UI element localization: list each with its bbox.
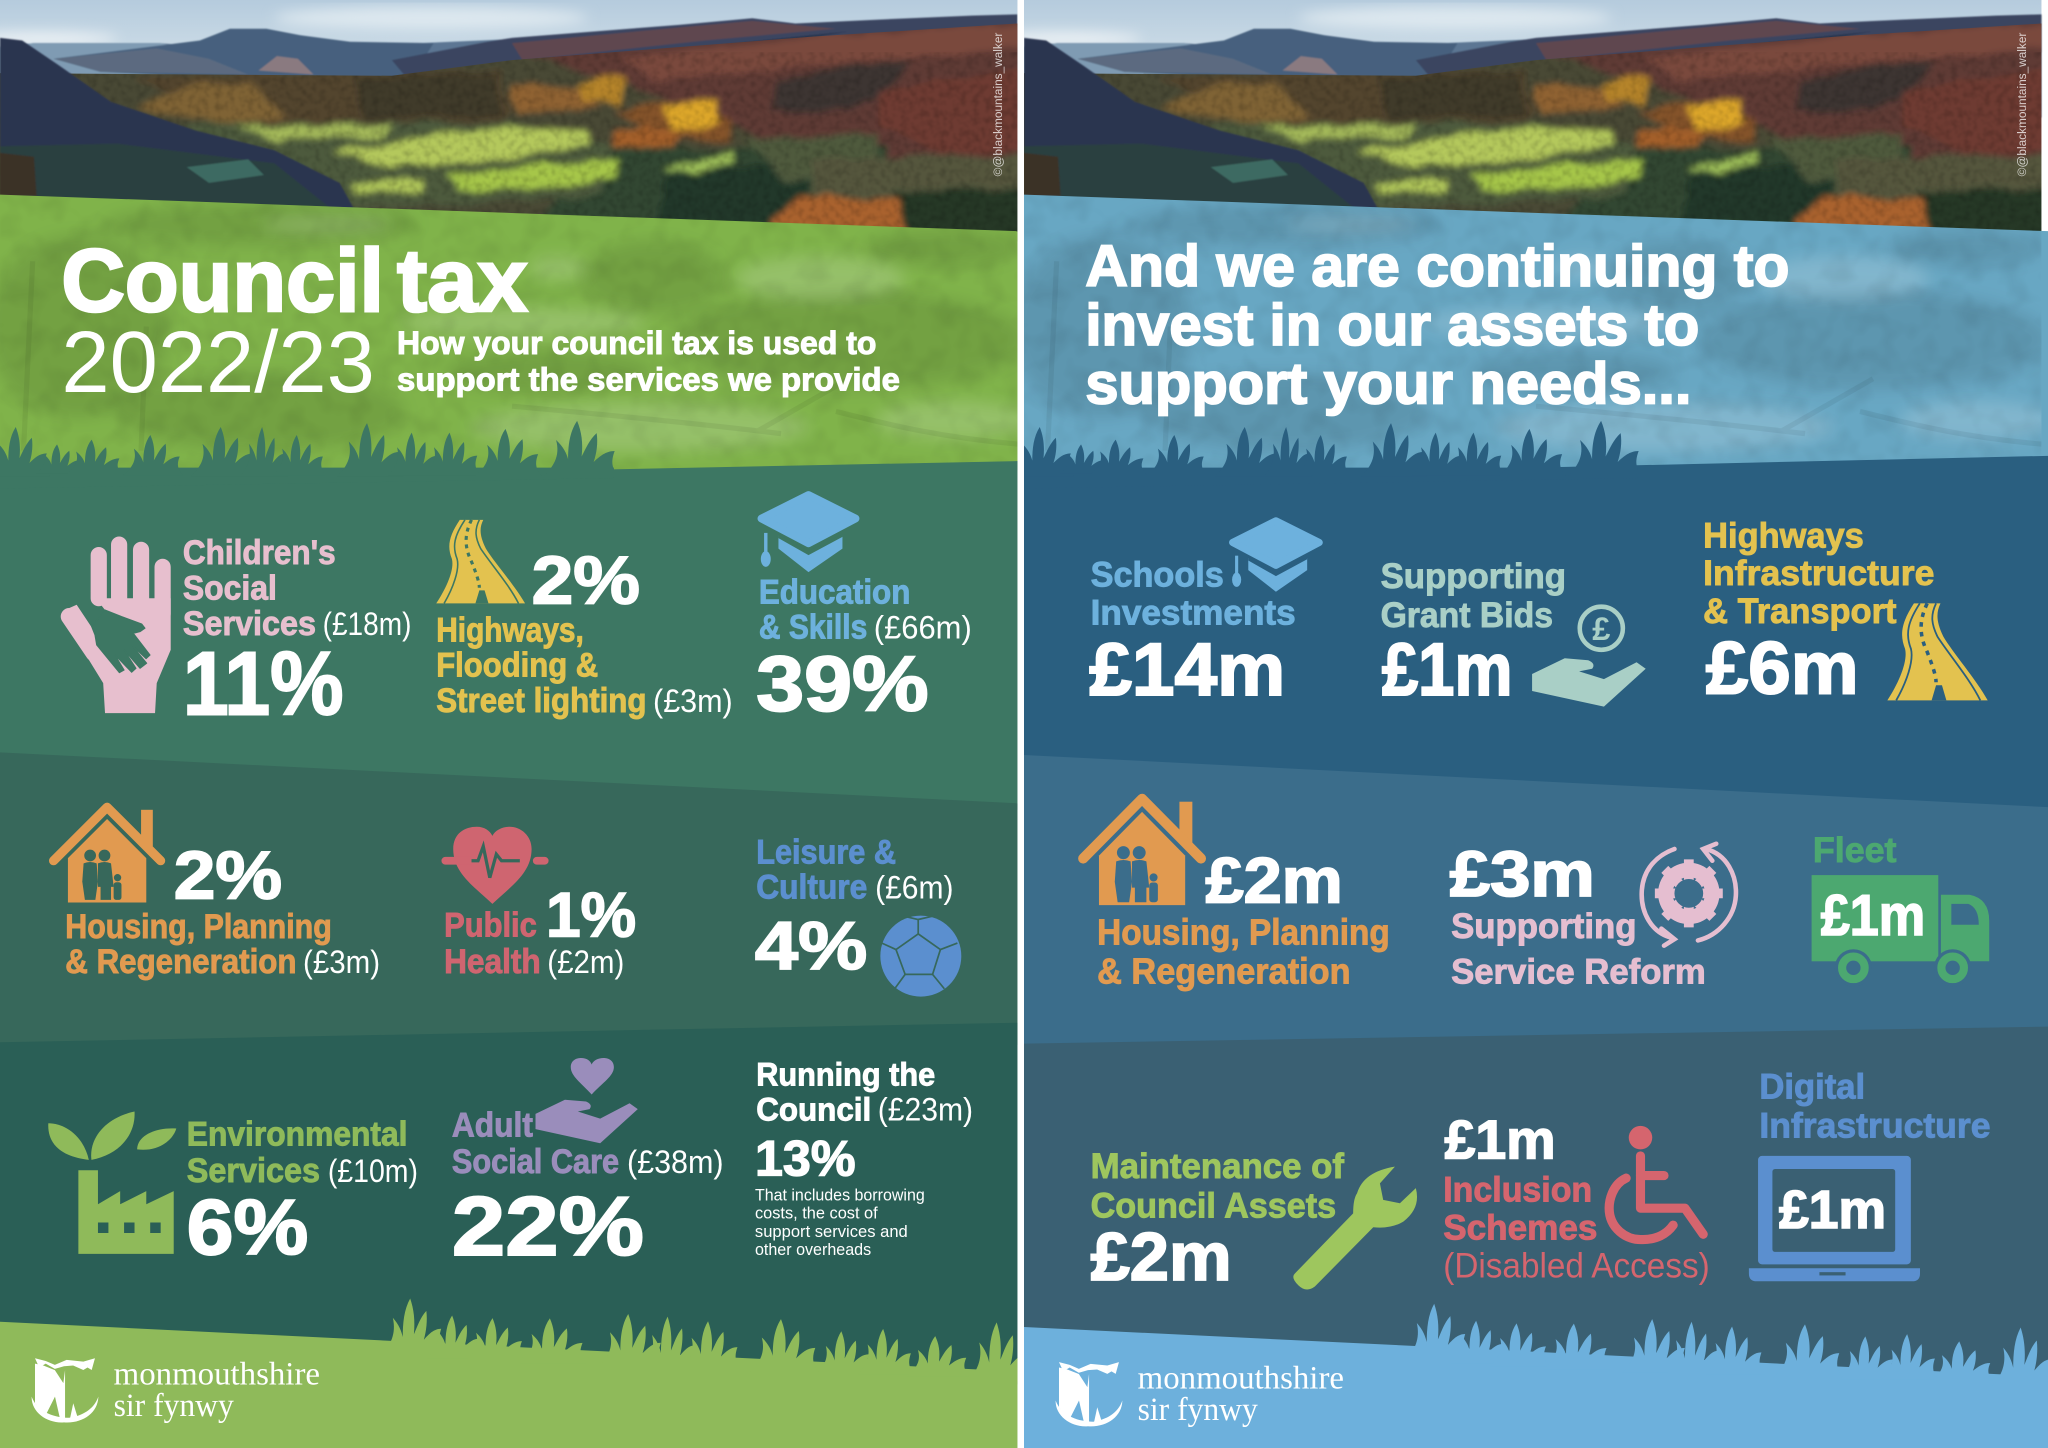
- title: And we are continuing to: [1085, 234, 1789, 299]
- item: highways: Street lighting: [436, 682, 647, 720]
- band: row three: [1024, 1027, 2048, 1384]
- icon: graduation cap: [761, 495, 856, 572]
- item: running the council: Council: [756, 1091, 871, 1128]
- photo credit: ©@blackmountains_walker: [2015, 33, 2029, 176]
- item: highways infrastructure: Highways: [1703, 516, 1864, 555]
- year: 2022/23: [61, 313, 375, 411]
- grass silhouette top: [0, 421, 615, 482]
- title: Council: [61, 231, 384, 330]
- item: highways: Highways,: [436, 611, 584, 649]
- title: [64, 245, 530, 314]
- item: running the council: Running the: [756, 1055, 935, 1092]
- icon: hand with coin: [1532, 607, 1646, 707]
- item: schools investments: Investments: [1091, 593, 1296, 632]
- item: inclusion schemes: [1443, 1109, 1710, 1285]
- panel: investment: [985, 0, 2048, 1448]
- item: highways infrastructure: £6m: [1706, 627, 1859, 710]
- item: inclusion schemes: Inclusion: [1443, 1171, 1592, 1210]
- item: housing: (£3m): [303, 943, 380, 980]
- item: inclusion schemes: (Disabled Access): [1443, 1246, 1710, 1285]
- item: highways: [436, 520, 733, 720]
- logo: monmouthshire: monmouthshire: [1138, 1360, 1344, 1396]
- item: digital infrastructure: £1m: [1779, 1181, 1886, 1240]
- title: tax: [397, 231, 528, 330]
- logo: monmouthshire: [32, 1356, 320, 1424]
- icon: graduation cap: [1232, 521, 1319, 592]
- icon: truck: [1812, 875, 1989, 985]
- photo: valley landscape: [0, 0, 1032, 248]
- item: running the council: other overheads: [755, 1241, 871, 1259]
- title: support your needs...: [1085, 352, 1691, 417]
- subtitle: support the services we provide: [397, 361, 900, 398]
- icon: hand and heart: [536, 1058, 638, 1143]
- item: highways: (£3m): [653, 682, 733, 719]
- item: housing: Housing, Planning: [65, 908, 332, 946]
- icon: wheelchair: [1609, 1126, 1703, 1240]
- item: digital infrastructure: [1749, 1067, 1991, 1281]
- item: adult social care: Adult: [452, 1106, 533, 1144]
- item: children's social services: Social: [183, 570, 277, 608]
- item: service reform: £3m: [1450, 838, 1595, 910]
- item: service reform: [1450, 838, 1736, 992]
- icon: house: [1083, 799, 1201, 905]
- item: housing: £2m: [1206, 845, 1343, 917]
- panel: council tax: [0, 0, 1032, 1448]
- item: public health: [444, 827, 636, 981]
- item: housing: 2%: [174, 839, 282, 914]
- logo: monmouthshire: sir fynwy: [1138, 1392, 1258, 1428]
- item: digital infrastructure: Infrastructure: [1759, 1107, 1991, 1146]
- item: schools investments: [1089, 521, 1319, 711]
- item: housing: [54, 807, 380, 981]
- item: environmental services: Services: [187, 1152, 320, 1190]
- item: children's social services: 11%: [183, 633, 344, 734]
- item: inclusion schemes: £1m: [1445, 1109, 1556, 1171]
- subtitle: How your council tax is used to: [397, 324, 876, 361]
- item: highways infrastructure: & Transport: [1703, 592, 1897, 631]
- band: row one: [1024, 456, 2048, 816]
- item: children's social services: Children's: [183, 534, 336, 572]
- item: running the council: support services and: [755, 1223, 908, 1241]
- band: row three: [0, 1023, 1017, 1384]
- item: leisure and culture: Leisure &: [756, 833, 896, 871]
- subtitle: [397, 324, 900, 398]
- item: maintenance of council assets: [1091, 1147, 1417, 1295]
- item: education: (£66m): [874, 609, 972, 646]
- icon: hand with coin: £: [1592, 610, 1610, 647]
- item: children's social services: Services: [183, 605, 316, 643]
- icon: road: [436, 520, 525, 603]
- photo: valley landscape: [985, 0, 2048, 248]
- item: education: & Skills: [759, 609, 867, 647]
- item: supporting grant bids: Grant Bids: [1381, 596, 1553, 635]
- item: public health: Health: [444, 943, 541, 981]
- logo: monmouthshire: monmouthshire: [114, 1356, 320, 1392]
- item: fleet: £1m: [1821, 884, 1925, 948]
- item: environmental services: [48, 1112, 418, 1271]
- item: housing: & Regeneration: [65, 943, 296, 981]
- title: [1085, 234, 1789, 417]
- item: adult social care: [452, 1058, 724, 1273]
- item: supporting grant bids: [1381, 557, 1646, 711]
- item: leisure and culture: Culture: [756, 869, 867, 907]
- item: highways infrastructure: [1703, 516, 1988, 710]
- grass silhouette top: [1011, 421, 1643, 488]
- item: housing: & Regeneration: [1097, 951, 1351, 992]
- item: public health: Public: [444, 906, 537, 944]
- item: public health: 1%: [546, 880, 636, 950]
- photo credit: ©@blackmountains_walker: [991, 33, 1005, 176]
- item: adult social care: 22%: [452, 1179, 644, 1273]
- icon: hand: [61, 545, 171, 713]
- band: row one: [0, 461, 1017, 810]
- icon: laptop: [1749, 1156, 1920, 1281]
- icon: house: [54, 807, 161, 903]
- item: leisure and culture: 4%: [755, 909, 867, 984]
- item: running the council: costs, the cost of: [755, 1205, 878, 1223]
- item: housing: [1083, 799, 1390, 992]
- grass silhouette bottom: [1406, 1304, 2048, 1386]
- item: environmental services: Environmental: [187, 1115, 408, 1153]
- item: service reform: Supporting: [1451, 907, 1637, 946]
- item: running the council: That includes borrowing: [755, 1186, 925, 1204]
- item: supporting grant bids: £1m: [1382, 628, 1512, 711]
- logo: monmouthshire: [1056, 1360, 1344, 1428]
- item: education: 39%: [756, 640, 929, 728]
- item: maintenance of council assets: £2m: [1091, 1220, 1232, 1295]
- item: adult social care: Social Care: [452, 1143, 619, 1181]
- item: supporting grant bids: Supporting: [1381, 557, 1566, 596]
- footer band: [1024, 1327, 2048, 1448]
- item: service reform: Service Reform: [1451, 953, 1706, 992]
- grass silhouette bottom: [391, 1298, 1018, 1372]
- item: children's social services: [60, 536, 410, 716]
- header band: [1011, 189, 2048, 490]
- item: adult social care: (£38m): [627, 1143, 724, 1180]
- band: row two: [1024, 755, 2048, 1051]
- item: education: [756, 495, 972, 728]
- item: schools investments: Schools: [1091, 555, 1224, 594]
- item: inclusion schemes: Schemes: [1443, 1209, 1597, 1248]
- item: highways: Flooding &: [436, 647, 598, 685]
- icon: factory and leaves: [48, 1112, 176, 1254]
- icon: heart pulse: [445, 827, 545, 904]
- item: environmental services: (£10m): [328, 1152, 418, 1189]
- item: public health: (£2m): [547, 943, 624, 980]
- item: maintenance of council assets: Council Assets: [1091, 1186, 1336, 1225]
- logo: monmouthshire: sir fynwy: [114, 1388, 234, 1424]
- item: leisure and culture: (£6m): [875, 869, 953, 906]
- band: row two: [0, 752, 1017, 1045]
- item: fleet: Fleet: [1813, 831, 1897, 870]
- item: education: Education: [759, 573, 910, 611]
- item: children's social services: (£18m): [323, 605, 411, 642]
- title: invest in our assets to: [1085, 293, 1699, 358]
- item: housing: Housing, Planning: [1097, 911, 1390, 952]
- icon: wrench: [1293, 1167, 1417, 1289]
- item: digital infrastructure: Digital: [1759, 1067, 1865, 1106]
- footer band: [0, 1322, 1017, 1448]
- item: running the council: [755, 1055, 973, 1259]
- header band: [0, 189, 1032, 490]
- item: environmental services: 6%: [187, 1183, 308, 1271]
- icon: gear and arrows: [1642, 844, 1736, 946]
- item: running the council: 13%: [755, 1131, 856, 1187]
- item: highways: 2%: [532, 543, 640, 618]
- item: fleet: [1812, 831, 1989, 985]
- icon: road: [1887, 603, 1988, 700]
- icon: football: [880, 916, 961, 997]
- item: running the council: (£23m): [878, 1091, 973, 1128]
- item: leisure and culture: [755, 833, 961, 997]
- item: highways infrastructure: Infrastructure: [1703, 554, 1934, 593]
- item: schools investments: £14m: [1089, 628, 1285, 711]
- item: maintenance of council assets: Maintenance of: [1091, 1147, 1344, 1186]
